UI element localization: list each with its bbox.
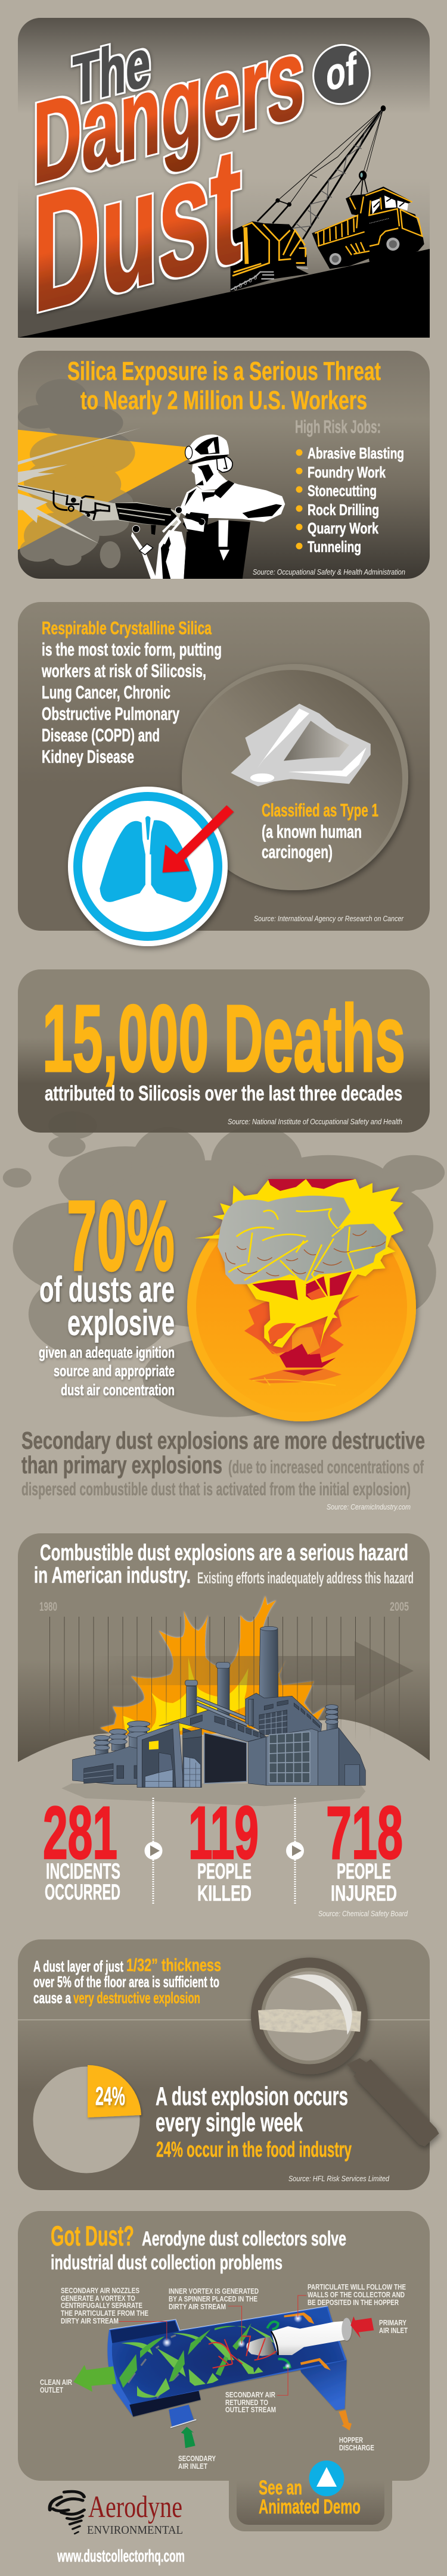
timeline: 1980 to 2005: 1980	[39, 1600, 57, 1614]
illustration: explosion	[187, 1179, 416, 1421]
panel: combustible dust hazard	[18, 1533, 430, 1918]
list: high risk jobs: Tunneling	[308, 538, 361, 556]
heading: got dust: industrial dust collection problems	[51, 2251, 283, 2274]
labels: collector callouts: OUTLET STREAM	[225, 2405, 276, 2414]
divider: play icon 1	[144, 1798, 162, 1905]
stat: 718 injured: 718	[326, 1792, 403, 1875]
panel: got dust	[18, 2211, 430, 2531]
labels: collector callouts: THE PARTICULATE FROM THE	[61, 2309, 148, 2318]
labels: collector callouts: PARTICULATE WILL FOLLOW THE	[308, 2282, 406, 2291]
text: dust layer thickness: very destructive explosion	[73, 1989, 200, 2007]
source: NIOSH: Source: National Institute of Occupational Safety and Health	[228, 1117, 402, 1126]
labels: collector callouts: AIR INLET	[178, 2462, 207, 2471]
stat: 70% of dusts explosive	[39, 1180, 175, 1399]
stat: 70% of dusts explosive: source and appropriate	[54, 1362, 175, 1380]
stat: 70% of dusts explosive: dust air concentration	[61, 1381, 175, 1399]
labels: collector callouts: RETURNED TO	[225, 2398, 268, 2407]
stat: 119 killed: 119	[188, 1792, 259, 1875]
labels: collector callouts: GENERATE A VORTEX TO	[61, 2294, 135, 2303]
panel: crystalline silica	[18, 602, 430, 946]
text: dust layer thickness: cause a	[33, 1989, 71, 2007]
labels: collector callouts: DISCHARGE	[339, 2443, 374, 2452]
text: dust layer thickness	[33, 1956, 221, 2007]
source: IARC: Source: International Agency or Research on Cancer	[254, 915, 404, 923]
background: dust clouds	[3, 1111, 445, 1417]
labels: collector callouts: OUTLET	[40, 2385, 63, 2394]
button: animated demo: Animated Demo	[259, 2496, 361, 2518]
heading: combustible dust: in American industry.	[34, 1563, 191, 1588]
list: high risk jobs: Abrasive Blasting	[308, 444, 404, 462]
callout lines	[119, 2296, 306, 2396]
labels: collector callouts: PRIMARY	[379, 2318, 406, 2327]
source: HFL: Source: HFL Risk Services Limited	[288, 2174, 390, 2183]
text: respirable crystalline silica	[41, 618, 222, 767]
labels: collector callouts: AIR INLET	[379, 2326, 408, 2335]
stat: 70% of dusts explosive: of dusts are	[39, 1270, 175, 1309]
labels: collector callouts: SECONDARY	[178, 2454, 216, 2463]
labels: collector callouts: BE DEPOSITED IN THE HOPPER	[308, 2298, 399, 2307]
divider: play icon 2	[286, 1798, 304, 1905]
text: classified as type 1: carcinogen)	[262, 841, 333, 862]
stat: 119 killed: PEOPLE	[197, 1859, 252, 1883]
labels: collector callouts: HOPPER	[339, 2435, 363, 2444]
chart: pie 24 percent: 24%	[95, 2082, 125, 2111]
labels: collector callouts: DIRTY AIR STREAM	[61, 2316, 119, 2325]
diagram: dust collector	[107, 2306, 352, 2428]
heading: got dust: Got Dust?	[51, 2220, 134, 2251]
labels: collector callouts: BY A SPINNER PLACED IN THE	[169, 2294, 257, 2303]
text: respirable crystalline silica: is the most toxic form, putting	[42, 639, 222, 660]
text: respirable crystalline silica: Kidney Disease	[42, 746, 134, 767]
title: of badge	[305, 37, 378, 112]
text: dust layer thickness: A dust layer of just	[33, 1957, 123, 1975]
chart: pie 24 percent	[33, 2065, 141, 2173]
stat: 281 incidents: OCCURRED	[45, 1880, 120, 1904]
heading: got dust: Aerodyne dust collectors solve	[142, 2228, 346, 2250]
icon: magnifying glass	[251, 1958, 439, 2146]
text: respirable crystalline silica: Obstructive Pulmonary	[42, 703, 180, 724]
illustration: smoke and light beam	[18, 379, 188, 568]
icon: lungs badge	[68, 787, 234, 946]
arrow: clean air outlet	[73, 2365, 116, 2392]
arrow: primary air inlet	[350, 2316, 374, 2338]
labels: collector callouts: CLEAN AIR	[40, 2378, 72, 2387]
stat: 281 incidents: INCIDENTS	[46, 1859, 120, 1883]
logo: Aerodyne Environmental: Aerodyne	[88, 2490, 182, 2524]
text: respirable crystalline silica: Respirable Crystalline Silica	[42, 618, 212, 638]
panel: 15,000 deaths	[18, 969, 430, 1133]
list: high risk jobs: Quarry Work	[308, 519, 378, 537]
labels: collector callouts: SECONDARY AIR NOZZLES	[61, 2286, 139, 2295]
timeline: 1980 to 2005: 2005	[390, 1600, 409, 1614]
illustration: dump truck	[312, 108, 424, 269]
url: www.dustcollectorhq.com	[57, 2547, 185, 2566]
stat: 718 injured: PEOPLE	[337, 1859, 391, 1883]
arrow: timeline	[89, 1641, 414, 1701]
list: high risk jobs: Foundry Work	[308, 463, 386, 481]
disc: type 1 classification	[182, 664, 408, 890]
list: high risk jobs: Stonecutting	[308, 482, 377, 500]
labels: collector callouts	[40, 2282, 408, 2471]
title: The: The	[73, 23, 150, 119]
illustration: factory	[61, 1626, 365, 1806]
heading: combustible dust	[34, 1540, 414, 1588]
stat: 119 killed: KILLED	[197, 1881, 252, 1906]
source: ceramic industry: Source: CeramicIndustry.com	[327, 1503, 411, 1511]
source: OSHA: Source: Occupational Safety & Health Administration	[253, 568, 405, 576]
illustration: worker with jackhammer	[18, 435, 285, 579]
arrow: red pointer	[163, 805, 234, 872]
stat: 281 incidents	[43, 1792, 120, 1904]
panel: header	[18, 11, 430, 348]
labels: collector callouts: INNER VORTEX IS GENERATED	[169, 2287, 259, 2296]
stat: 119 killed	[188, 1792, 259, 1906]
text: explosion every week: every single week	[156, 2108, 303, 2137]
labels: collector callouts: DIRTY AIR STREAM	[169, 2302, 226, 2311]
text: respirable crystalline silica: Disease (COPD) and	[42, 725, 160, 746]
text: secondary dust explosions	[21, 1427, 425, 1499]
stat: 70% of dusts explosive: given an adequate ignition	[39, 1343, 175, 1361]
list: high risk jobs: Rock Drilling	[308, 501, 379, 519]
panel: dust layer and pie	[18, 1939, 439, 2190]
text: dust layer thickness: 1/32” thickness	[126, 1956, 221, 1975]
heading: got dust	[51, 2220, 346, 2274]
stat: 70% of dusts explosive: explosive	[67, 1303, 175, 1343]
source: chemical safety board: Source: Chemical Safety Board	[318, 1909, 408, 1918]
text: dust layer thickness: over 5% of the floor area is sufficient to	[33, 1973, 219, 1991]
list: high risk jobs	[295, 416, 404, 556]
illustration: crane	[231, 105, 386, 292]
labels: collector callouts: SECONDARY AIR	[225, 2390, 275, 2399]
stat: 718 injured: INJURED	[331, 1881, 397, 1906]
icon: silica rock	[231, 704, 371, 786]
section: 70% explosive	[39, 1179, 416, 1421]
button: animated demo	[237, 2460, 384, 2525]
logo: Aerodyne Environmental: ENVIRONMENTAL	[87, 2524, 183, 2537]
text: respirable crystalline silica: workers at risk of Silicosis,	[41, 660, 206, 681]
arrow: hopper discharge	[339, 2410, 352, 2431]
text: classified as type 1	[262, 800, 378, 862]
heading: silica threat	[67, 357, 381, 415]
text: secondary dust explosions: than primary explosions	[21, 1451, 222, 1479]
timeline: 1980 to 2005	[39, 1600, 409, 1742]
black ground slope	[18, 249, 430, 338]
title: Dust: Dust	[33, 110, 241, 348]
labels: collector callouts: WALLS OF THE COLLECTOR AND	[308, 2290, 405, 2299]
stat: 70% of dusts explosive: 70%	[67, 1180, 175, 1292]
title: of badge: of	[326, 43, 356, 101]
logo: Aerodyne Environmental	[49, 2490, 183, 2537]
list: high risk jobs: High Risk Jobs:	[295, 416, 381, 437]
text: classified as type 1: (a known human	[262, 821, 362, 842]
text: respirable crystalline silica: Lung Cancer, Chronic	[42, 682, 170, 703]
stat: 281 incidents: 281	[43, 1792, 117, 1875]
button: animated demo: See an	[259, 2477, 302, 2499]
panel: silica exposure	[18, 351, 430, 579]
labels: collector callouts: CENTRIFUGALLY SEPARATE	[61, 2301, 142, 2310]
text: explosion every week	[156, 2082, 352, 2162]
stat: 718 injured	[326, 1792, 403, 1906]
illustration: flames	[100, 1596, 325, 1739]
text: classified as type 1: Classified as Type 1	[262, 800, 378, 821]
arrow: secondary air inlet	[181, 2427, 195, 2448]
